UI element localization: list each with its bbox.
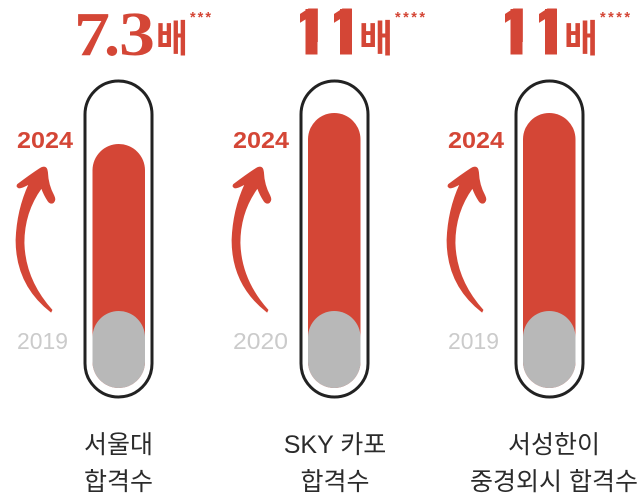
heading: 11 times: 배 xyxy=(564,19,598,61)
tube xyxy=(85,81,152,397)
bar: 2024 value xyxy=(308,113,360,388)
bar: 2019 value xyxy=(523,311,576,388)
icon: growth arrow xyxy=(232,167,271,312)
icon: growth arrow xyxy=(16,167,55,312)
panel: SKY Kapo xyxy=(232,0,425,496)
heading: 11 times xyxy=(505,8,630,56)
label: 2019: 2019 xyxy=(17,328,68,354)
caption xyxy=(284,431,386,496)
label: 2020: 2020 xyxy=(233,328,288,354)
caption: 서울대 xyxy=(84,431,153,459)
heading: 11 times: 배 xyxy=(359,19,393,61)
caption xyxy=(470,431,638,496)
caption: 합격수 xyxy=(300,468,370,496)
label: 2024: 2024 xyxy=(448,127,504,153)
heading: 11 times: **** xyxy=(395,10,425,26)
bar: 2019 value xyxy=(92,311,145,388)
caption: 중경외시 합격수 xyxy=(470,468,638,496)
caption: SKY 카포 xyxy=(284,431,386,459)
heading: 7.3 times: *** xyxy=(190,10,211,26)
icon: growth arrow xyxy=(447,167,486,312)
label: 2019: 2019 xyxy=(448,328,499,354)
label: 2024: 2024 xyxy=(233,127,289,153)
bar: 2024 value xyxy=(92,144,145,388)
caption xyxy=(84,431,153,496)
heading: 7.3 times: 7 xyxy=(74,1,110,69)
heading: 7.3 times: 3 xyxy=(119,1,155,69)
heading: 7.3 times: . xyxy=(104,1,120,69)
label: 2024: 2024 xyxy=(17,127,73,153)
heading: 7.3 times: 배 xyxy=(156,19,188,61)
tube xyxy=(516,81,583,397)
heading: 7.3 times xyxy=(74,1,211,69)
heading: 11 times: **** xyxy=(600,10,630,26)
panel: Seoul National University xyxy=(16,1,211,496)
heading: 11 times xyxy=(300,8,425,56)
caption: 서성한이 xyxy=(508,431,600,459)
panel: Seoul Sungkyun Hanyang xyxy=(447,0,638,496)
tube xyxy=(301,81,368,397)
caption: 합격수 xyxy=(84,468,153,496)
bar: 2020 value xyxy=(308,311,360,388)
bar: 2024 value xyxy=(523,113,576,388)
